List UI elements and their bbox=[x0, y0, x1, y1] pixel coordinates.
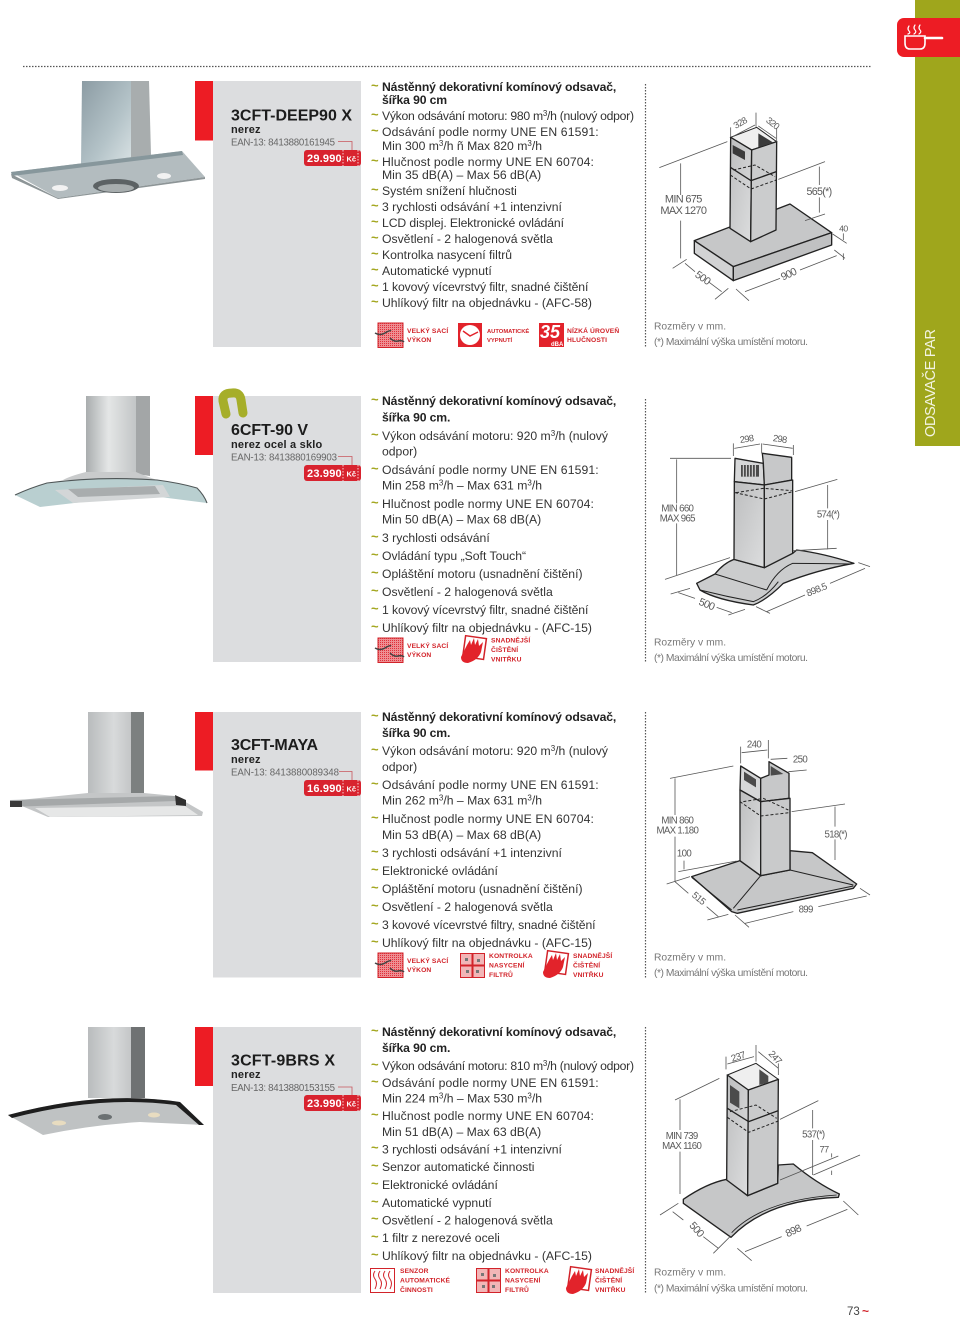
spec list: 3 bbox=[439, 794, 444, 802]
info panel: 3CFT-9BRS X bbox=[231, 1052, 335, 1070]
dimension note: Rozměry v mm. bbox=[654, 322, 726, 332]
spec list: 3 bbox=[551, 429, 556, 438]
info panel: 3CFT-DEEP90 X bbox=[231, 108, 352, 124]
feature icons: SENZOR bbox=[400, 1268, 429, 1275]
dimension diagram 2: MAX 965 bbox=[660, 513, 695, 524]
feature icons: KONTROLKA bbox=[489, 953, 533, 960]
dimension diagram 4 bbox=[660, 1045, 860, 1261]
spec list: /h – Max 631 m bbox=[443, 794, 527, 808]
feature icons: NÍZKÁ ÚROVEŇ bbox=[567, 326, 619, 335]
spec list: Min 53 dB(A) – Max 68 dB(A) bbox=[382, 828, 541, 842]
spec list: ~ bbox=[371, 107, 379, 122]
spec list: ~ bbox=[371, 182, 379, 197]
feature icons: SNADNĚJŠÍ bbox=[491, 636, 530, 644]
spec list: /h – Max 530 m bbox=[443, 1092, 527, 1106]
photo: hood 1 bbox=[11, 81, 205, 199]
spec list: ~ bbox=[371, 1107, 379, 1122]
spec list: Opláštění motoru (usnadnění čištění) bbox=[382, 882, 583, 896]
spec list: Výkon odsávání motoru: 810 m bbox=[382, 1059, 543, 1073]
spec list: Osvětlení - 2 halogenová světla bbox=[382, 585, 553, 599]
spec list: Automatické vypnutí bbox=[382, 264, 492, 278]
spec list: 3 rychlosti odsávání +1 intenzivní bbox=[382, 1142, 562, 1156]
spec list: 3 rychlosti odsávání bbox=[382, 531, 490, 545]
spec list: /h bbox=[532, 1092, 542, 1106]
spec list: ~ bbox=[371, 294, 379, 309]
spec list: ~ bbox=[371, 262, 379, 277]
spec list: Hlučnost podle normy UNE EN 60704: bbox=[382, 155, 594, 169]
spec list: ~ bbox=[371, 214, 379, 229]
feature icons: VNITŘKU bbox=[595, 1285, 626, 1294]
top dotted rule bbox=[23, 66, 871, 68]
spec list: Min 50 dB(A) – Max 68 dB(A) bbox=[382, 512, 541, 526]
spec list: ~ bbox=[371, 1194, 379, 1209]
spec list: 3 rychlosti odsávání +1 intenzivní bbox=[382, 200, 562, 214]
spec list: 3 bbox=[439, 478, 444, 488]
spec list: 1 filtr z nerezové oceli bbox=[382, 1231, 500, 1245]
spec list: /h (nulový odpor) bbox=[547, 109, 634, 123]
spec list: ~ bbox=[371, 916, 379, 931]
info panel: 3CFT-MAYA bbox=[231, 737, 318, 754]
spec list: 3 bbox=[527, 478, 532, 488]
dimension diagram 2: 898.5 bbox=[805, 581, 829, 599]
feature icons: KONTROLKA bbox=[505, 1268, 549, 1275]
spec list: ~ bbox=[371, 844, 379, 859]
page number: ~ bbox=[862, 1304, 869, 1318]
spec list: Uhlíkový filtr na objednávku - (AFC-15) bbox=[382, 621, 592, 635]
spec list: ~ bbox=[371, 392, 379, 407]
spec list bbox=[371, 1023, 634, 1263]
info panel: nerez bbox=[231, 1069, 261, 1081]
dimension note: (*) Maximální výška umístění motoru. bbox=[654, 653, 808, 664]
feature icons: VNITŘKU bbox=[491, 654, 522, 664]
spec list: ~ bbox=[371, 547, 379, 562]
spec list: Min 262 m bbox=[382, 794, 439, 808]
spec list: 1 kovový vícevrstvý filtr, snadné čištění bbox=[382, 280, 589, 294]
dotted divider bbox=[644, 84, 646, 348]
feature icons: VÝKON bbox=[407, 965, 431, 974]
dimension diagram 2: 500 bbox=[697, 596, 717, 613]
spec list: Hlučnost podle normy UNE EN 60704: bbox=[382, 812, 594, 826]
side tab: category bbox=[897, 0, 960, 446]
spec list: ~ bbox=[371, 1074, 379, 1089]
info panel bbox=[213, 712, 361, 978]
spec list: Výkon odsávání motoru: 920 m bbox=[382, 429, 551, 443]
spec list: 3 bbox=[527, 1092, 532, 1100]
spec list: 3 rychlosti odsávání +1 intenzivní bbox=[382, 846, 562, 860]
spec list: ~ bbox=[371, 246, 379, 261]
dimension diagram 1: 40 bbox=[839, 224, 848, 234]
price: Kč bbox=[346, 1100, 356, 1108]
feature icons: VELKÝ SACÍ bbox=[407, 956, 448, 965]
spec list: Systém snížení hlučnosti bbox=[382, 184, 517, 198]
feature icons: ČIŠTĚNÍ bbox=[573, 960, 600, 970]
dotted divider bbox=[644, 399, 646, 663]
price: Kč bbox=[346, 784, 356, 794]
price bbox=[304, 1095, 361, 1111]
spec list: Uhlíkový filtr na objednávku - (AFC-58) bbox=[382, 296, 592, 310]
photo: hood 3 bbox=[10, 712, 203, 817]
spec list: ~ bbox=[371, 862, 379, 877]
price: Kč bbox=[346, 470, 356, 478]
price: 16.990 bbox=[307, 783, 342, 795]
dimension note: Rozměry v mm. bbox=[654, 638, 726, 648]
feature icons: SNADNĚJŠÍ bbox=[595, 1266, 634, 1275]
info panel: EAN-13: 8413880089348 bbox=[231, 768, 339, 778]
feature icons bbox=[370, 1266, 634, 1294]
dimension diagram 3: 100 bbox=[677, 849, 691, 860]
spec list: /h (nulový odpor) bbox=[547, 1059, 634, 1073]
dimension diagram 3: 515 bbox=[689, 890, 707, 908]
feature icons: VELKÝ SACÍ bbox=[407, 326, 448, 335]
spec list: Senzor automatické činnosti bbox=[382, 1160, 534, 1174]
dimension diagram 2 bbox=[660, 433, 870, 615]
spec list: Nástěnný dekorativní komínový odsavač, bbox=[382, 394, 616, 408]
dimension note: (*) Maximální výška umístění motoru. bbox=[654, 968, 808, 979]
dimension diagram 1: MAX 1270 bbox=[660, 205, 707, 217]
dimension note bbox=[654, 952, 808, 979]
price: 29.990 bbox=[307, 153, 342, 165]
spec list: Odsávání podle normy UNE EN 61591: bbox=[382, 463, 599, 477]
spec list: Elektronické ovládání bbox=[382, 1178, 498, 1192]
info panel: EAN-13: 8413880153155 bbox=[231, 1083, 335, 1094]
feature icons: VELKÝ SACÍ bbox=[407, 641, 448, 650]
dimension diagram 1: 328 bbox=[732, 115, 749, 131]
spec list: Hlučnost podle normy UNE EN 60704: bbox=[382, 497, 594, 511]
green badge bbox=[223, 393, 243, 414]
dimension diagram 2: 298 bbox=[772, 433, 788, 445]
dimension note bbox=[654, 1268, 808, 1294]
spec list: Nástěnný dekorativní komínový odsavač, bbox=[382, 80, 616, 94]
spec list: Min 35 dB(A) – Max 56 dB(A) bbox=[382, 168, 541, 182]
price bbox=[304, 150, 361, 166]
spec list: /h ñ Max 820 m bbox=[443, 139, 527, 153]
spec list bbox=[371, 392, 616, 635]
spec list: Uhlíkový filtr na objednávku - (AFC-15) bbox=[382, 1249, 592, 1263]
spec list: 3 bbox=[551, 744, 556, 753]
spec list: Odsávání podle normy UNE EN 61591: bbox=[382, 778, 599, 792]
page number bbox=[847, 1304, 869, 1318]
spec list: 3 bbox=[543, 109, 548, 118]
spec list: ~ bbox=[371, 583, 379, 598]
feature icons bbox=[375, 636, 530, 664]
feature icons: ČINNOSTI bbox=[400, 1285, 433, 1294]
spec list: ~ bbox=[371, 776, 379, 791]
spec list: ~ bbox=[371, 708, 379, 723]
spec list: Výkon odsávání motoru: 980 m bbox=[382, 109, 543, 123]
dotted divider bbox=[644, 1027, 646, 1293]
spec list: Nástěnný dekorativní komínový odsavač, bbox=[382, 1025, 616, 1039]
dimension note bbox=[654, 638, 808, 664]
spec list: ~ bbox=[371, 123, 379, 138]
spec list: ~ bbox=[371, 1140, 379, 1155]
spec list: ~ bbox=[371, 461, 379, 476]
spec list: /h (nulový bbox=[555, 744, 609, 758]
spec list: ~ bbox=[371, 230, 379, 245]
spec list: Nástěnný dekorativní komínový odsavač, bbox=[382, 710, 616, 724]
dimension note: Rozměry v mm. bbox=[654, 952, 726, 964]
dimension diagram 2: MIN 660 bbox=[661, 503, 694, 514]
feature icons bbox=[375, 322, 619, 348]
spec list: Elektronické ovládání bbox=[382, 864, 498, 878]
spec list: ~ bbox=[371, 880, 379, 895]
spec list: Min 258 m bbox=[382, 478, 439, 492]
feature icons: HLUČNOSTI bbox=[567, 335, 607, 344]
spec list: ~ bbox=[371, 1057, 379, 1072]
dimension diagram 2: 298 bbox=[739, 433, 754, 445]
dimension note: (*) Maximální výška umístění motoru. bbox=[654, 1284, 808, 1294]
dimension diagram 4: MAX 1160 bbox=[662, 1141, 701, 1152]
spec list: ~ bbox=[371, 742, 379, 757]
icon: steaming pot bbox=[905, 25, 942, 49]
product 1: 3CFT-DEEP90 X bbox=[11, 78, 848, 348]
dimension diagram 3: 240 bbox=[747, 740, 761, 751]
spec list: ~ bbox=[371, 198, 379, 213]
spec list: LCD displej. Elektronické ovládání bbox=[382, 216, 565, 230]
dimension note bbox=[654, 322, 808, 348]
price bbox=[304, 465, 361, 481]
red tab bbox=[195, 396, 213, 455]
dimension diagram 3: 518(*) bbox=[825, 829, 847, 840]
dotted divider bbox=[644, 712, 646, 978]
dimension diagram 1: 900 bbox=[779, 266, 799, 283]
feature icons: FILTRŮ bbox=[505, 1284, 529, 1294]
spec list bbox=[371, 708, 616, 950]
dimension diagram 1: 320 bbox=[764, 115, 781, 132]
spec list: Opláštění motoru (usnadnění čištění) bbox=[382, 567, 583, 581]
dimension diagram 3: 899 bbox=[799, 905, 813, 916]
feature icons: SNADNĚJŠÍ bbox=[573, 951, 612, 960]
spec list: /h – Max 631 m bbox=[443, 478, 527, 492]
feature icons: ČIŠTĚNÍ bbox=[595, 1276, 622, 1284]
spec list: Hlučnost podle normy UNE EN 60704: bbox=[382, 1109, 594, 1123]
dimension diagram 3: 250 bbox=[793, 754, 807, 765]
dimension diagram 4: MIN 739 bbox=[666, 1131, 698, 1142]
spec list: šířka 90 cm. bbox=[382, 726, 450, 740]
price: Kč bbox=[346, 154, 356, 164]
spec list: Ovládání typu „Soft Touch“ bbox=[382, 549, 526, 563]
spec list: 3 bbox=[527, 794, 532, 802]
spec list: /h bbox=[532, 478, 542, 492]
dimension diagram 4: 247 bbox=[766, 1049, 784, 1067]
red tab bbox=[195, 1027, 213, 1086]
dimension diagram 3: MIN 860 bbox=[661, 815, 694, 826]
spec list: Osvětlení - 2 halogenová světla bbox=[382, 1214, 553, 1228]
spec list: ~ bbox=[371, 153, 379, 168]
photo: hood 4 bbox=[8, 1027, 204, 1135]
spec list: ~ bbox=[371, 495, 379, 510]
price: 23.990 bbox=[307, 468, 342, 480]
spec list: /h bbox=[532, 139, 542, 153]
spec list: 3 bbox=[527, 139, 532, 148]
dimension note: (*) Maximální výška umístění motoru. bbox=[654, 337, 808, 348]
spec list: Výkon odsávání motoru: 920 m bbox=[382, 744, 551, 758]
dimension diagram 1: MIN 675 bbox=[665, 194, 702, 206]
spec list: ~ bbox=[371, 810, 379, 825]
spec list: ~ bbox=[371, 1229, 379, 1244]
info panel bbox=[213, 1027, 361, 1293]
spec list: ~ bbox=[371, 427, 379, 442]
spec list: Min 300 m bbox=[382, 139, 439, 153]
feature icons: FILTRŮ bbox=[489, 969, 513, 979]
spec list: Kontrolka nasycení filtrů bbox=[382, 248, 512, 262]
feature icons: AUTOMATICKÉ bbox=[487, 327, 529, 335]
spec list: Osvětlení - 2 halogenová světla bbox=[382, 232, 553, 246]
spec list: ~ bbox=[371, 1247, 379, 1262]
info panel: nerez bbox=[231, 754, 261, 766]
dimension diagram 4: 537(*) bbox=[802, 1130, 825, 1141]
dimension diagram 4: 500 bbox=[686, 1220, 706, 1240]
dimension diagram 3 bbox=[656, 740, 870, 927]
spec list: ~ bbox=[371, 619, 379, 634]
spec list: 3 bbox=[439, 139, 444, 148]
category label: ODSAVAČE PAR bbox=[922, 329, 939, 437]
spec list: ~ bbox=[371, 898, 379, 913]
feature icons: VNITŘKU bbox=[573, 970, 604, 979]
red tab bbox=[195, 81, 213, 140]
spec list: Automatické vypnutí bbox=[382, 1196, 492, 1210]
info panel bbox=[213, 393, 361, 662]
feature icons: NASYCENÍ bbox=[489, 960, 525, 970]
spec list: ~ bbox=[371, 934, 379, 949]
price bbox=[304, 780, 361, 796]
spec list: Odsávání podle normy UNE EN 61591: bbox=[382, 1076, 599, 1090]
spec list: ~ bbox=[371, 1023, 379, 1038]
info panel: EAN-13: 8413880169903 bbox=[231, 452, 337, 464]
info panel: 6CFT-90 V bbox=[231, 422, 308, 439]
spec list: šířka 90 cm. bbox=[382, 410, 450, 424]
page number: 73 bbox=[847, 1306, 860, 1318]
spec list: /h (nulový bbox=[555, 429, 609, 443]
spec list: Min 224 m bbox=[382, 1092, 439, 1106]
spec list: ~ bbox=[371, 565, 379, 580]
dimension diagram 4: 237 bbox=[730, 1050, 747, 1065]
dimension diagram 3: MAX 1.180 bbox=[656, 825, 699, 836]
spec list: 3 bbox=[439, 1092, 444, 1100]
photo: hood 2 bbox=[15, 396, 207, 507]
product 3: 3CFT-MAYA bbox=[10, 708, 870, 979]
spec list: ~ bbox=[371, 601, 379, 616]
feature icons: NASYCENÍ bbox=[505, 1276, 541, 1284]
feature icons: dBA bbox=[551, 342, 564, 348]
info panel: nerez ocel a sklo bbox=[231, 439, 323, 451]
feature icons bbox=[375, 951, 612, 979]
dimension note: Rozměry v mm. bbox=[654, 1268, 726, 1278]
spec list: odpor) bbox=[382, 760, 417, 774]
spec list: Osvětlení - 2 halogenová světla bbox=[382, 900, 553, 914]
spec list: šířka 90 cm bbox=[382, 93, 447, 107]
dimension diagram 4: 77 bbox=[819, 1144, 829, 1154]
feature icons: AUTOMATICKÉ bbox=[400, 1276, 451, 1284]
dimension diagram 4: 898 bbox=[784, 1222, 804, 1240]
spec list bbox=[371, 78, 634, 310]
spec list: 1 kovový vícevrstvý filtr, snadné čištění bbox=[382, 603, 589, 617]
feature icons: ČIŠTĚNÍ bbox=[491, 645, 518, 654]
spec list: odpor) bbox=[382, 444, 417, 458]
feature icons: VÝKON bbox=[407, 335, 431, 344]
info panel bbox=[213, 81, 361, 347]
dimension diagram 2: 574(*) bbox=[817, 509, 840, 520]
price: 23.990 bbox=[307, 1098, 342, 1110]
feature icons: VYPNUTÍ bbox=[487, 336, 513, 344]
spec list: ~ bbox=[371, 278, 379, 293]
spec list: ~ bbox=[371, 1158, 379, 1173]
dimension diagram 1: 565(*) bbox=[806, 186, 832, 198]
product 2: 6CFT-90 V bbox=[15, 392, 870, 664]
spec list: ~ bbox=[371, 1211, 379, 1226]
product 4: 3CFT-9BRS X bbox=[8, 1023, 860, 1294]
spec list: 3 bbox=[543, 1059, 548, 1068]
spec list: Odsávání podle normy UNE EN 61591: bbox=[382, 125, 599, 139]
info panel: nerez bbox=[231, 124, 261, 136]
spec list: Uhlíkový filtr na objednávku - (AFC-15) bbox=[382, 936, 592, 950]
spec list: ~ bbox=[371, 78, 379, 93]
dimension diagram 1: 500 bbox=[692, 269, 713, 288]
feature icons: VÝKON bbox=[407, 650, 431, 659]
spec list: ~ bbox=[371, 1176, 379, 1191]
dimension diagram 1 bbox=[659, 113, 848, 301]
spec list: šířka 90 cm. bbox=[382, 1041, 450, 1055]
spec list: Min 51 dB(A) – Max 63 dB(A) bbox=[382, 1125, 541, 1139]
spec list: /h bbox=[532, 794, 542, 808]
spec list: 3 kovové vícevrstvé filtry, snadné čištění bbox=[382, 918, 596, 932]
red tab bbox=[195, 712, 213, 770]
spec list: ~ bbox=[371, 529, 379, 544]
feature icons: 35 bbox=[540, 322, 561, 342]
info panel: EAN-13: 8413880161945 bbox=[231, 138, 335, 148]
